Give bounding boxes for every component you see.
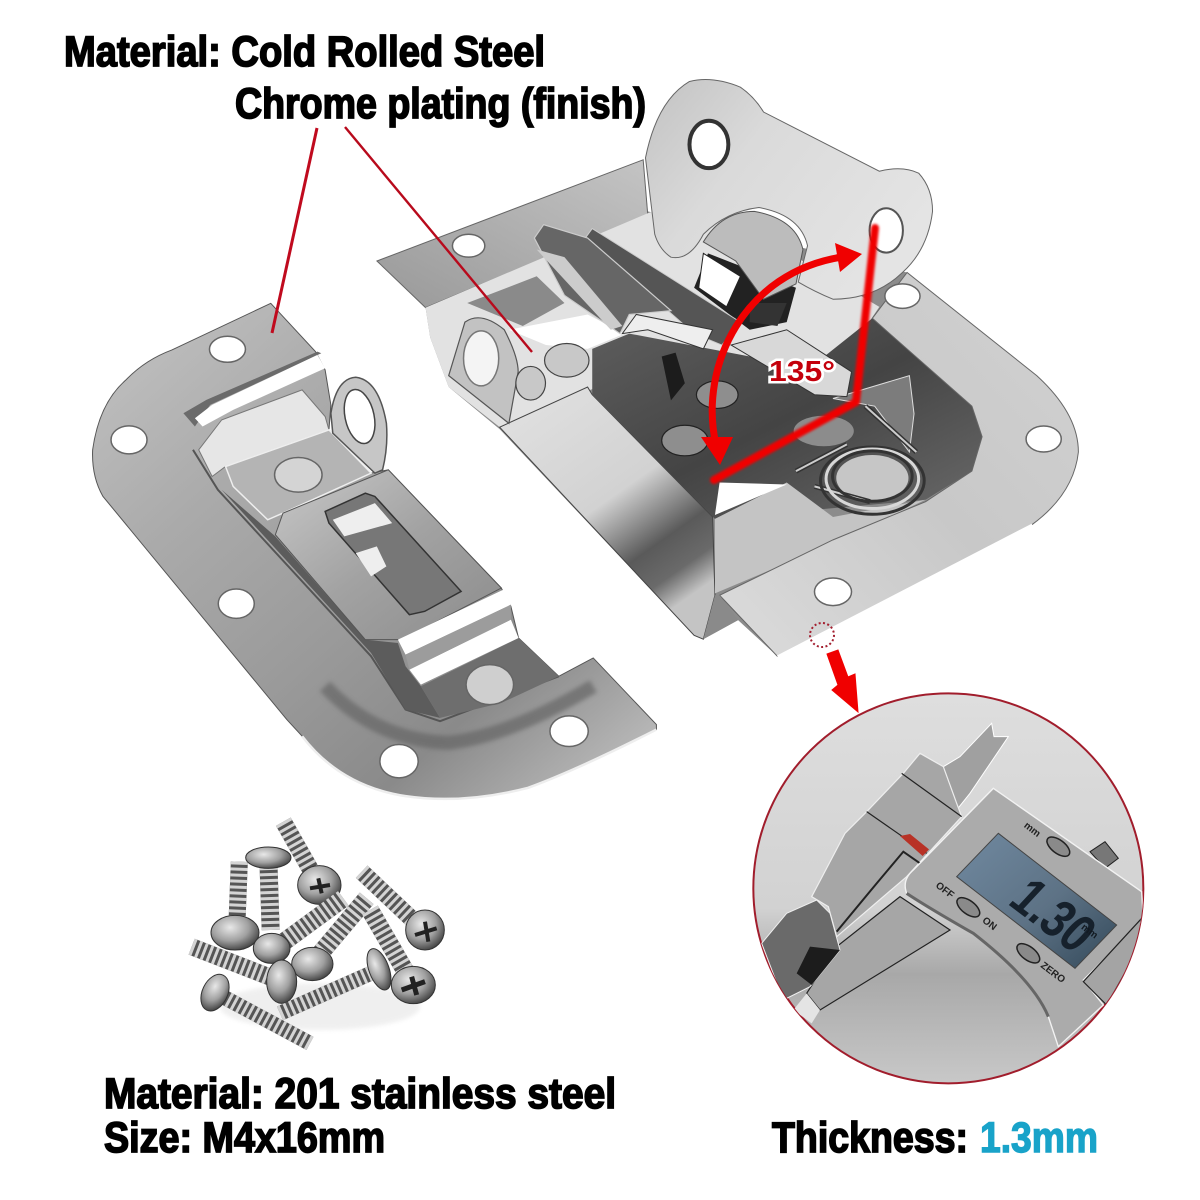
screw 1 <box>283 822 341 904</box>
mount hole 1 <box>209 336 245 362</box>
lower body shadow edge <box>907 893 1048 1017</box>
angle label: 135° <box>769 356 835 388</box>
screw 2 <box>211 862 259 950</box>
screw 8 <box>370 910 413 985</box>
mount hole 3 <box>218 589 254 618</box>
lens background <box>753 693 1143 1083</box>
plate body <box>93 303 656 799</box>
upright bracket <box>645 80 933 299</box>
thickness text: Thickness: <box>772 1114 968 1162</box>
lug rivets <box>516 344 589 400</box>
lower rivet <box>466 665 514 705</box>
top flange <box>377 160 648 308</box>
recess floor light <box>715 483 926 593</box>
lcd screen <box>957 833 1117 968</box>
mount hole 2 <box>111 426 147 454</box>
handle highlight <box>537 250 622 330</box>
side lug <box>449 318 518 423</box>
small pin <box>662 353 685 400</box>
spring opening <box>836 455 908 501</box>
inner left rim <box>193 450 559 721</box>
upper shadow <box>183 352 321 427</box>
upper rivet <box>275 457 322 492</box>
side lug opening <box>464 331 499 386</box>
screw specification text <box>104 1070 616 1162</box>
caliper knob <box>1090 842 1118 868</box>
thickness text: 1.3mm <box>980 1114 1098 1162</box>
arrow to magnified view <box>827 650 858 712</box>
bracket hole top <box>689 121 728 168</box>
thickness text <box>772 1114 1098 1162</box>
base silhouette <box>377 160 1078 656</box>
magnified caliper view <box>753 693 1143 1083</box>
loop lug <box>331 377 387 473</box>
clip shadow <box>797 947 840 985</box>
right wing <box>731 330 852 397</box>
screw shadow <box>220 983 420 1030</box>
front flange edge <box>777 525 1032 656</box>
mm button <box>1046 836 1070 858</box>
bend center <box>406 605 511 670</box>
leader line: chrome plating <box>345 127 532 352</box>
upper recess <box>426 196 879 427</box>
front side wall <box>500 387 715 639</box>
screw 5 <box>253 898 343 963</box>
screw 3 <box>246 847 291 930</box>
catch slot <box>325 493 461 615</box>
spring <box>796 406 924 514</box>
lower bend bands <box>398 590 519 685</box>
mount hole 5 <box>550 716 588 747</box>
beam line <box>867 773 962 853</box>
bright recess area <box>509 314 625 349</box>
handle bar lower <box>585 229 740 345</box>
mount hole 4 <box>380 745 418 778</box>
cylinder shine <box>699 253 740 307</box>
upper white band <box>195 355 325 427</box>
flange holes <box>452 234 1061 606</box>
spring plate <box>833 376 914 452</box>
lcd unit: mm <box>1079 922 1100 941</box>
screw 4 <box>362 872 444 950</box>
upper recess reflection <box>467 276 564 326</box>
mm button label: mm <box>1022 820 1042 840</box>
recess rivets <box>662 381 738 456</box>
power button <box>956 896 980 918</box>
zero label: ZERO <box>1038 960 1067 986</box>
curved arrow <box>712 257 842 445</box>
beam slot <box>837 852 920 932</box>
slot reflections <box>333 503 392 576</box>
off label: OFF <box>933 880 956 901</box>
arrow head top <box>835 243 862 272</box>
screw 6 <box>292 898 367 981</box>
lower jaw <box>807 897 950 1010</box>
upper wall <box>199 390 329 476</box>
screw 10 <box>195 970 310 1043</box>
left latch plate <box>93 303 656 799</box>
bottom edge highlight <box>302 730 656 799</box>
caliper beam <box>812 753 962 937</box>
dotted detail circle <box>810 623 834 647</box>
cylinder base <box>750 303 787 326</box>
leader line: material <box>272 128 317 333</box>
heading: plate material <box>64 28 646 128</box>
right body inset <box>1083 918 1142 1005</box>
lower bend <box>703 595 738 639</box>
main dark recess <box>592 318 982 519</box>
rear rivet <box>794 416 854 446</box>
bracket hole right <box>870 208 903 253</box>
on label: ON <box>980 915 998 933</box>
heading: plate material: Chrome plating (finish) <box>235 80 646 128</box>
clip dark <box>762 900 840 1000</box>
red indicator <box>900 834 929 856</box>
135 degree angle annotation <box>701 228 875 480</box>
catch plate <box>275 470 501 640</box>
screw 9 <box>280 946 435 1013</box>
lower floor <box>421 638 559 718</box>
recess floor <box>226 430 371 520</box>
handle neck <box>694 253 796 330</box>
screw 7 <box>192 947 297 1003</box>
caliper display body <box>905 788 1143 1047</box>
screw pile <box>192 822 444 1043</box>
handle hinge <box>622 314 713 349</box>
heading: plate material: Material: Cold Rolled Steel <box>64 28 545 76</box>
lcd reading: 1.30 <box>998 867 1109 963</box>
clip bright <box>793 993 820 1023</box>
handle bar upper <box>534 225 671 334</box>
cylinder cap <box>703 211 803 299</box>
zero button <box>1016 942 1040 964</box>
loop opening <box>340 387 379 446</box>
angle lines <box>714 228 875 480</box>
arrow head bottom <box>701 437 733 465</box>
right latch assembly <box>377 80 1078 656</box>
right flange <box>720 272 1078 656</box>
screw specification text: Material: 201 stainless steel <box>104 1070 616 1118</box>
caliper jaw tips <box>943 723 1008 810</box>
side wall shadow <box>222 490 440 718</box>
screw specification text: Size: M4x16mm <box>104 1114 385 1162</box>
bottom rim shading <box>325 686 593 743</box>
white facet <box>715 483 787 515</box>
